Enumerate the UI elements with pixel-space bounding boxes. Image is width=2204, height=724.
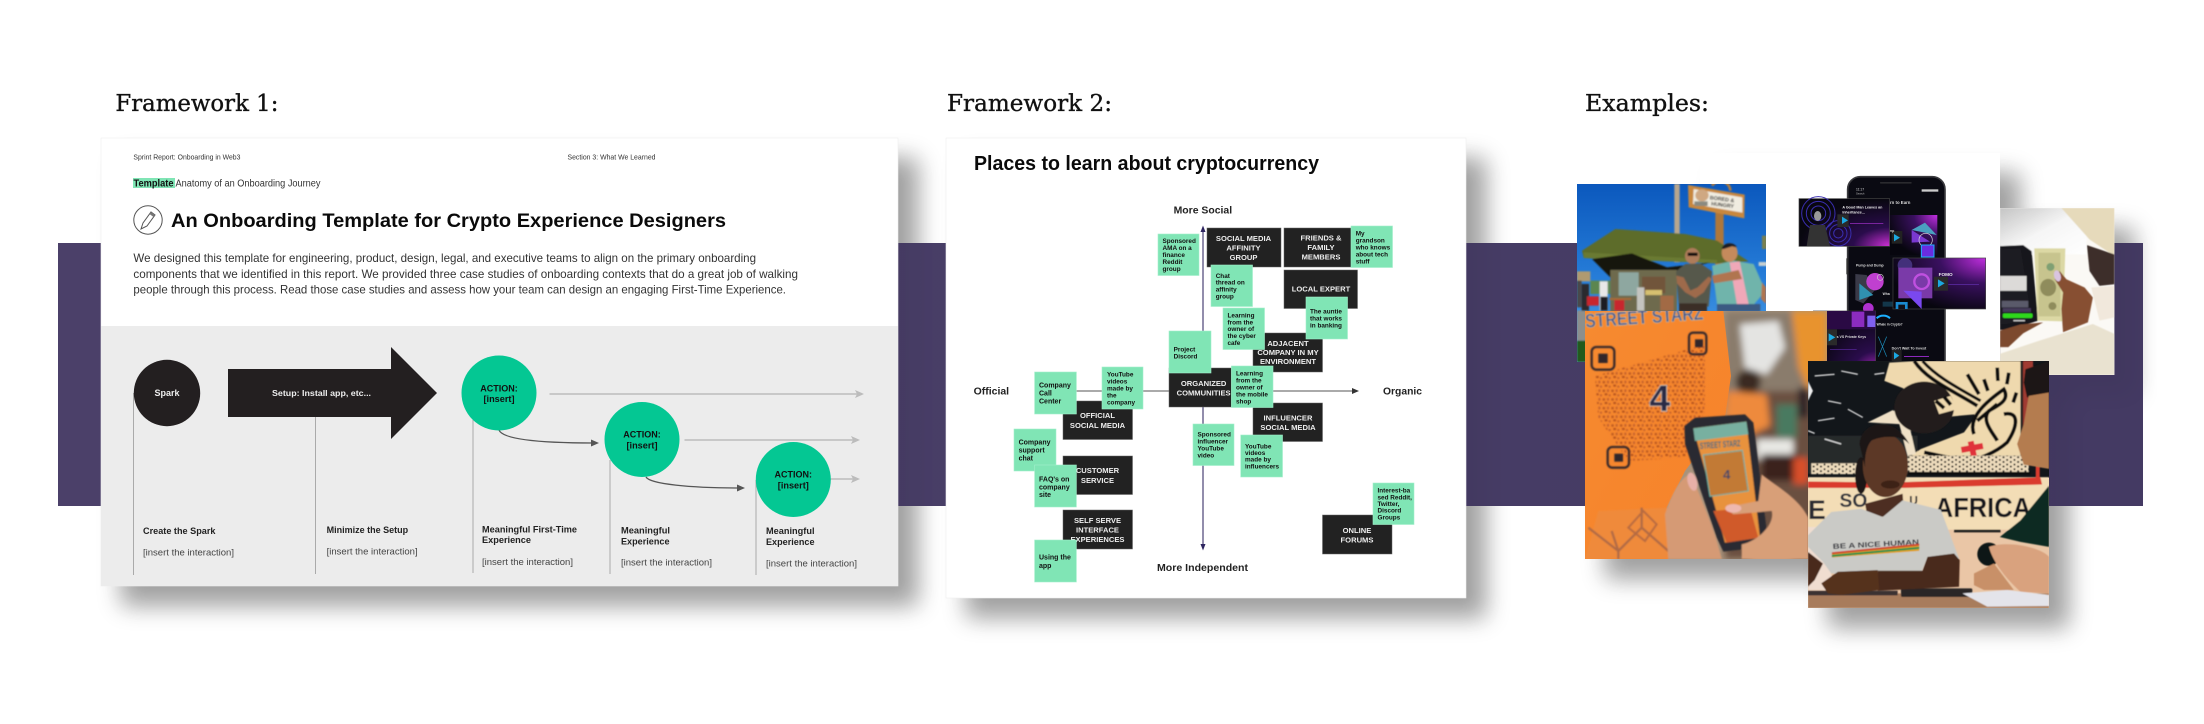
action circle 1: ACTION: bbox=[480, 384, 518, 394]
note: company support chat: support bbox=[1019, 448, 1045, 454]
example: workshop photo with mural bbox=[1808, 361, 2049, 608]
chart title: Places to learn about cryptocurrency bbox=[974, 153, 1320, 175]
action circle 3: [insert] bbox=[778, 480, 809, 490]
intro paragraph: We designed this template for engineering, product, design, legal, and executive teams to align on the primary onboarding bbox=[133, 251, 756, 265]
note: using the app bbox=[1035, 540, 1076, 582]
note: the auntie: The auntie bbox=[1310, 308, 1342, 316]
category: social media affinity group: AFFINITY bbox=[1226, 244, 1261, 252]
note: interest-based groups: sed Reddit, bbox=[1378, 494, 1412, 502]
note: sponsored AMA: Sponsored bbox=[1162, 238, 1196, 245]
category: social media affinity group: SOCIAL MEDIA bbox=[1216, 234, 1272, 243]
note: sponsored influencer video: Sponsored bbox=[1198, 432, 1231, 438]
note: the auntie bbox=[1306, 297, 1348, 339]
video card: good man inheritance: Inheritance... bbox=[1842, 210, 1865, 214]
note: my grandson bbox=[1351, 226, 1392, 268]
step label: meaningful experience 2: [insert the interaction] bbox=[621, 558, 712, 568]
note: mobile shop owner: the mobile bbox=[1236, 392, 1268, 398]
intro paragraph bbox=[133, 251, 798, 296]
step label: create the spark: [insert the interaction] bbox=[143, 548, 234, 558]
action circle 1 bbox=[462, 356, 536, 430]
note: cyber cafe owner: Learning bbox=[1228, 312, 1255, 320]
phone in hands bbox=[1665, 414, 1808, 559]
sign: bored and hungry bbox=[1688, 185, 1745, 218]
template tag: Template bbox=[134, 178, 174, 190]
note: company call center: Call bbox=[1039, 390, 1052, 398]
step label: minimize the setup: [insert the interaction] bbox=[327, 546, 418, 558]
template tag bbox=[133, 178, 320, 190]
template tag: Anatomy of an Onboarding Journey bbox=[176, 178, 320, 190]
action circle 2: [insert] bbox=[626, 440, 658, 450]
category: customer service: SERVICE bbox=[1081, 476, 1114, 485]
video card: private keys: s VS Private Keys bbox=[1837, 335, 1866, 339]
phone body: Don't Wait To Invest bbox=[1892, 346, 1927, 350]
example: white card with phone app bbox=[1707, 158, 2000, 361]
mural: lettering band: SO bbox=[1840, 491, 1867, 512]
note: project discord bbox=[1169, 331, 1211, 373]
action circle 3 bbox=[756, 442, 831, 517]
note: influencer YouTube videos: videos bbox=[1245, 450, 1266, 457]
example: street starz jersey photo bbox=[1585, 303, 1827, 559]
video card: FOMO: FOMO bbox=[1939, 272, 1953, 277]
step label: meaningful experience 2: Meaningful bbox=[621, 526, 670, 536]
axis labels: Official bbox=[974, 386, 1009, 398]
action circle 2: ACTION: bbox=[623, 430, 661, 440]
note: mobile shop owner: shop bbox=[1236, 398, 1251, 406]
category: online forums: FORUMS bbox=[1341, 536, 1373, 544]
background band bbox=[58, 243, 2143, 506]
example: money photo bbox=[2000, 208, 2114, 375]
title: An Onboarding Template for Crypto Experience Designers bbox=[171, 210, 726, 232]
note: sponsored AMA: finance bbox=[1162, 252, 1185, 259]
note: the auntie: that works bbox=[1310, 316, 1342, 322]
note: mobile shop owner: owner of bbox=[1236, 384, 1263, 392]
panel: framework 1 onboarding template bbox=[101, 138, 898, 586]
intro paragraph: people through this process. Read those case studies and assess how your team can design an engaging First-Time Experience. bbox=[133, 282, 786, 296]
axes bbox=[1060, 226, 1359, 550]
note: chat thread: group bbox=[1216, 294, 1234, 300]
note: my grandson: grandson bbox=[1356, 238, 1385, 244]
category: influencer social media bbox=[1253, 403, 1322, 442]
note: the auntie: in banking bbox=[1310, 322, 1342, 330]
note: FAQs bbox=[1035, 465, 1076, 507]
note: YouTube company videos: videos bbox=[1107, 378, 1128, 386]
note: cyber cafe owner: the cyber bbox=[1228, 333, 1256, 340]
note: sponsored influencer video: influencer bbox=[1198, 438, 1229, 446]
note: FAQs: company bbox=[1039, 484, 1070, 492]
phone body: 11:17 bbox=[1856, 188, 1864, 192]
category: friends and family members: FAMILY bbox=[1307, 243, 1335, 252]
category: online forums: ONLINE bbox=[1343, 526, 1371, 535]
note: influencer YouTube videos: influencers bbox=[1245, 464, 1280, 470]
note: company call center: Company bbox=[1039, 382, 1071, 390]
step label: meaningful first-time experience: Experience bbox=[482, 535, 531, 546]
category: customer service: CUSTOMER bbox=[1076, 466, 1120, 475]
mural: lettering band: E bbox=[1808, 495, 1826, 525]
arrows: continuing paths bbox=[550, 390, 864, 483]
phone in hands: 4 bbox=[1723, 467, 1731, 482]
note: interest-based groups: Groups bbox=[1378, 514, 1401, 522]
note: sponsored AMA: Reddit bbox=[1162, 259, 1183, 266]
action circle 2 bbox=[604, 402, 680, 477]
setup arrow: Setup: Install app, etc... bbox=[272, 388, 371, 398]
note: my grandson: who knows bbox=[1355, 244, 1391, 252]
category: influencer social media: SOCIAL MEDIA bbox=[1260, 423, 1316, 432]
step label: meaningful experience 3: [insert the interaction] bbox=[766, 558, 857, 570]
note: influencer YouTube videos bbox=[1241, 435, 1282, 477]
note: influencer YouTube videos: YouTube bbox=[1245, 444, 1272, 450]
note: YouTube company videos: made by bbox=[1107, 386, 1133, 392]
note: my grandson: about tech bbox=[1356, 252, 1388, 258]
note: using the app: Using the bbox=[1039, 554, 1071, 562]
category: social media affinity group: GROUP bbox=[1230, 253, 1257, 262]
note: chat thread bbox=[1211, 265, 1252, 306]
running header right: Section 3: What We Learned bbox=[568, 152, 656, 162]
note: YouTube company videos: the bbox=[1107, 392, 1117, 400]
video card: good man inheritance bbox=[1799, 197, 1890, 246]
category: friends and family members: MEMBERS bbox=[1302, 252, 1340, 262]
note: sponsored AMA: group bbox=[1162, 266, 1181, 273]
category: adjacent company bbox=[1253, 333, 1322, 372]
note: cyber cafe owner: from the bbox=[1228, 319, 1254, 326]
category: official social media bbox=[1063, 401, 1132, 440]
man in grey t-shirt: BE A NICE HUMAN bbox=[1833, 537, 1919, 551]
note: my grandson: stuff bbox=[1356, 258, 1370, 266]
step label: meaningful experience 2 bbox=[621, 526, 712, 568]
phone body: mp bbox=[1889, 229, 1894, 233]
jersey QR pattern bbox=[1585, 344, 1705, 559]
step label: create the spark: Create the Spark bbox=[143, 526, 216, 537]
note: mobile shop owner bbox=[1231, 366, 1273, 408]
icon: pencil bbox=[134, 206, 162, 234]
note: chat thread: Chat bbox=[1216, 273, 1231, 280]
step label: meaningful first-time experience: Meaningful First-Time bbox=[482, 524, 577, 536]
note: sponsored AMA bbox=[1158, 234, 1199, 276]
note: mobile shop owner: Learning bbox=[1236, 370, 1263, 378]
note: sponsored AMA: AMA on a bbox=[1162, 245, 1192, 252]
sign: bored and hungry: BORED & bbox=[1709, 195, 1735, 204]
category: local expert: LOCAL EXPERT bbox=[1292, 284, 1351, 294]
note: project discord: Project bbox=[1174, 346, 1196, 354]
step label: meaningful experience 3: Meaningful bbox=[766, 526, 814, 537]
woman in foreground bbox=[1962, 361, 2049, 607]
mural: lettering band: AFRICA bbox=[1935, 492, 2031, 523]
note: company support chat bbox=[1014, 429, 1056, 471]
phone body: rn to Earn bbox=[1890, 200, 1911, 205]
note: cyber cafe owner bbox=[1223, 308, 1264, 350]
step label: meaningful experience 3 bbox=[766, 526, 857, 570]
arrows: progression curves bbox=[499, 430, 745, 492]
note: chat thread: affinity bbox=[1216, 286, 1237, 294]
note: company support chat: chat bbox=[1019, 456, 1034, 462]
step label: meaningful experience 2: Experience bbox=[621, 536, 670, 548]
step label: meaningful first-time experience: [insert the interaction] bbox=[482, 557, 573, 568]
note: chat thread: thread on bbox=[1216, 280, 1245, 287]
category: official social media: OFFICIAL bbox=[1080, 411, 1115, 420]
axis labels: More Independent bbox=[1157, 562, 1249, 574]
spark circle bbox=[134, 360, 200, 426]
note: FAQs: FAQ's on bbox=[1039, 476, 1069, 484]
phone body: Search bbox=[1856, 192, 1865, 196]
note: interest-based groups: Interest-ba bbox=[1378, 488, 1411, 494]
step label: minimize the setup: Minimize the Setup bbox=[327, 525, 408, 536]
category: online forums bbox=[1322, 515, 1392, 554]
note: interest-based groups: Twitter, bbox=[1378, 501, 1400, 508]
note: sponsored influencer video: YouTube bbox=[1198, 446, 1224, 452]
example: restaurant photo bbox=[1577, 184, 1766, 362]
phone body: Whale in Crypto? bbox=[1877, 322, 1903, 326]
note: YouTube company videos: company bbox=[1107, 400, 1136, 406]
note: my grandson: My bbox=[1356, 230, 1365, 238]
note: project discord: Discord bbox=[1174, 354, 1197, 360]
category: self serve interface experiences: INTERFACE bbox=[1076, 526, 1119, 534]
note: sponsored influencer video bbox=[1193, 424, 1234, 466]
phone body: Pump and Dump bbox=[1856, 264, 1884, 268]
category: adjacent company: ADJACENT bbox=[1267, 339, 1309, 348]
man in grey shirt bbox=[1676, 248, 1712, 311]
video card: private keys bbox=[1813, 311, 1876, 378]
journey vertical rules bbox=[134, 393, 756, 575]
action circle 1: [insert] bbox=[484, 394, 514, 404]
category: organized communities: COMMUNITIES bbox=[1177, 388, 1231, 398]
category: official social media: SOCIAL MEDIA bbox=[1070, 421, 1126, 430]
note: sponsored influencer video: video bbox=[1198, 452, 1214, 460]
spark circle: Spark bbox=[154, 388, 180, 398]
video card: good man inheritance: A Good Man Leaves an bbox=[1842, 206, 1882, 210]
phone body: Wha bbox=[1883, 292, 1890, 296]
step label: create the spark bbox=[143, 526, 234, 558]
category: organized communities bbox=[1169, 368, 1241, 407]
step label: meaningful experience 3: Experience bbox=[766, 537, 814, 548]
video card: FOMO bbox=[1893, 258, 1986, 309]
category: customer service bbox=[1063, 456, 1132, 494]
note: mobile shop owner: from the bbox=[1236, 378, 1262, 384]
axis labels: More Social bbox=[1174, 204, 1232, 216]
note: YouTube company videos bbox=[1102, 367, 1143, 409]
setup arrow bbox=[228, 347, 437, 439]
axis labels: Organic bbox=[1383, 386, 1422, 398]
note: using the app: app bbox=[1039, 563, 1051, 570]
running header left: Sprint Report: Onboarding in Web3 bbox=[133, 152, 240, 162]
note: influencer YouTube videos: made by bbox=[1245, 457, 1271, 464]
jersey number: 4 bbox=[1649, 377, 1670, 419]
mural: lettering band bbox=[1808, 461, 2049, 532]
step label: meaningful first-time experience bbox=[482, 524, 577, 568]
panel: framework 2 places to learn chart bbox=[946, 138, 1466, 598]
category: friends and family members bbox=[1284, 228, 1358, 267]
note: interest-based groups bbox=[1373, 483, 1414, 524]
heading: Framework 1: Framework 1: bbox=[115, 91, 278, 117]
action circle 3: ACTION: bbox=[775, 470, 812, 480]
category: self serve interface experiences bbox=[1063, 510, 1132, 549]
category: organized communities: ORGANIZED bbox=[1181, 379, 1227, 388]
axis labels bbox=[974, 204, 1422, 574]
sign: bored and hungry: HUNGRY bbox=[1711, 201, 1735, 210]
mural: hand figure bbox=[1811, 361, 2033, 475]
note: FAQs: site bbox=[1039, 492, 1051, 499]
note: company support chat: Company bbox=[1019, 440, 1051, 446]
note: company call center: Center bbox=[1039, 398, 1061, 406]
man in grey t-shirt bbox=[1808, 424, 1960, 595]
category: social media affinity group bbox=[1207, 228, 1281, 267]
category: adjacent company: COMPANY IN MY bbox=[1257, 348, 1319, 357]
category: influencer social media: INFLUENCER bbox=[1264, 414, 1313, 422]
note: cyber cafe owner: cafe bbox=[1228, 340, 1241, 347]
heading: Framework 2: Framework 2: bbox=[947, 91, 1112, 117]
category: local expert bbox=[1284, 270, 1358, 308]
category: adjacent company: ENVIRONMENT bbox=[1260, 357, 1316, 366]
phone in hands: STREET STARZ bbox=[1699, 438, 1741, 451]
category: self serve interface experiences: SELF SERVE bbox=[1074, 516, 1121, 525]
mural: lettering band: U bbox=[1909, 493, 1918, 507]
man in floral shirt bbox=[1712, 243, 1766, 311]
heading: Examples: Examples: bbox=[1585, 91, 1709, 117]
category: friends and family members: FRIENDS & bbox=[1301, 234, 1342, 242]
note: interest-based groups: Discord bbox=[1378, 508, 1401, 514]
note: cyber cafe owner: owner of bbox=[1228, 326, 1255, 333]
category: self serve interface experiences: EXPERIENCES bbox=[1070, 535, 1125, 544]
step label: minimize the setup bbox=[327, 525, 418, 558]
note: YouTube company videos: YouTube bbox=[1107, 372, 1134, 378]
phone body bbox=[1846, 177, 1945, 390]
intro paragraph: components that we identified in this report. We provided three case studies of onboarding contexts that do a great job of walking bbox=[133, 267, 798, 281]
note: company call center bbox=[1035, 372, 1076, 414]
